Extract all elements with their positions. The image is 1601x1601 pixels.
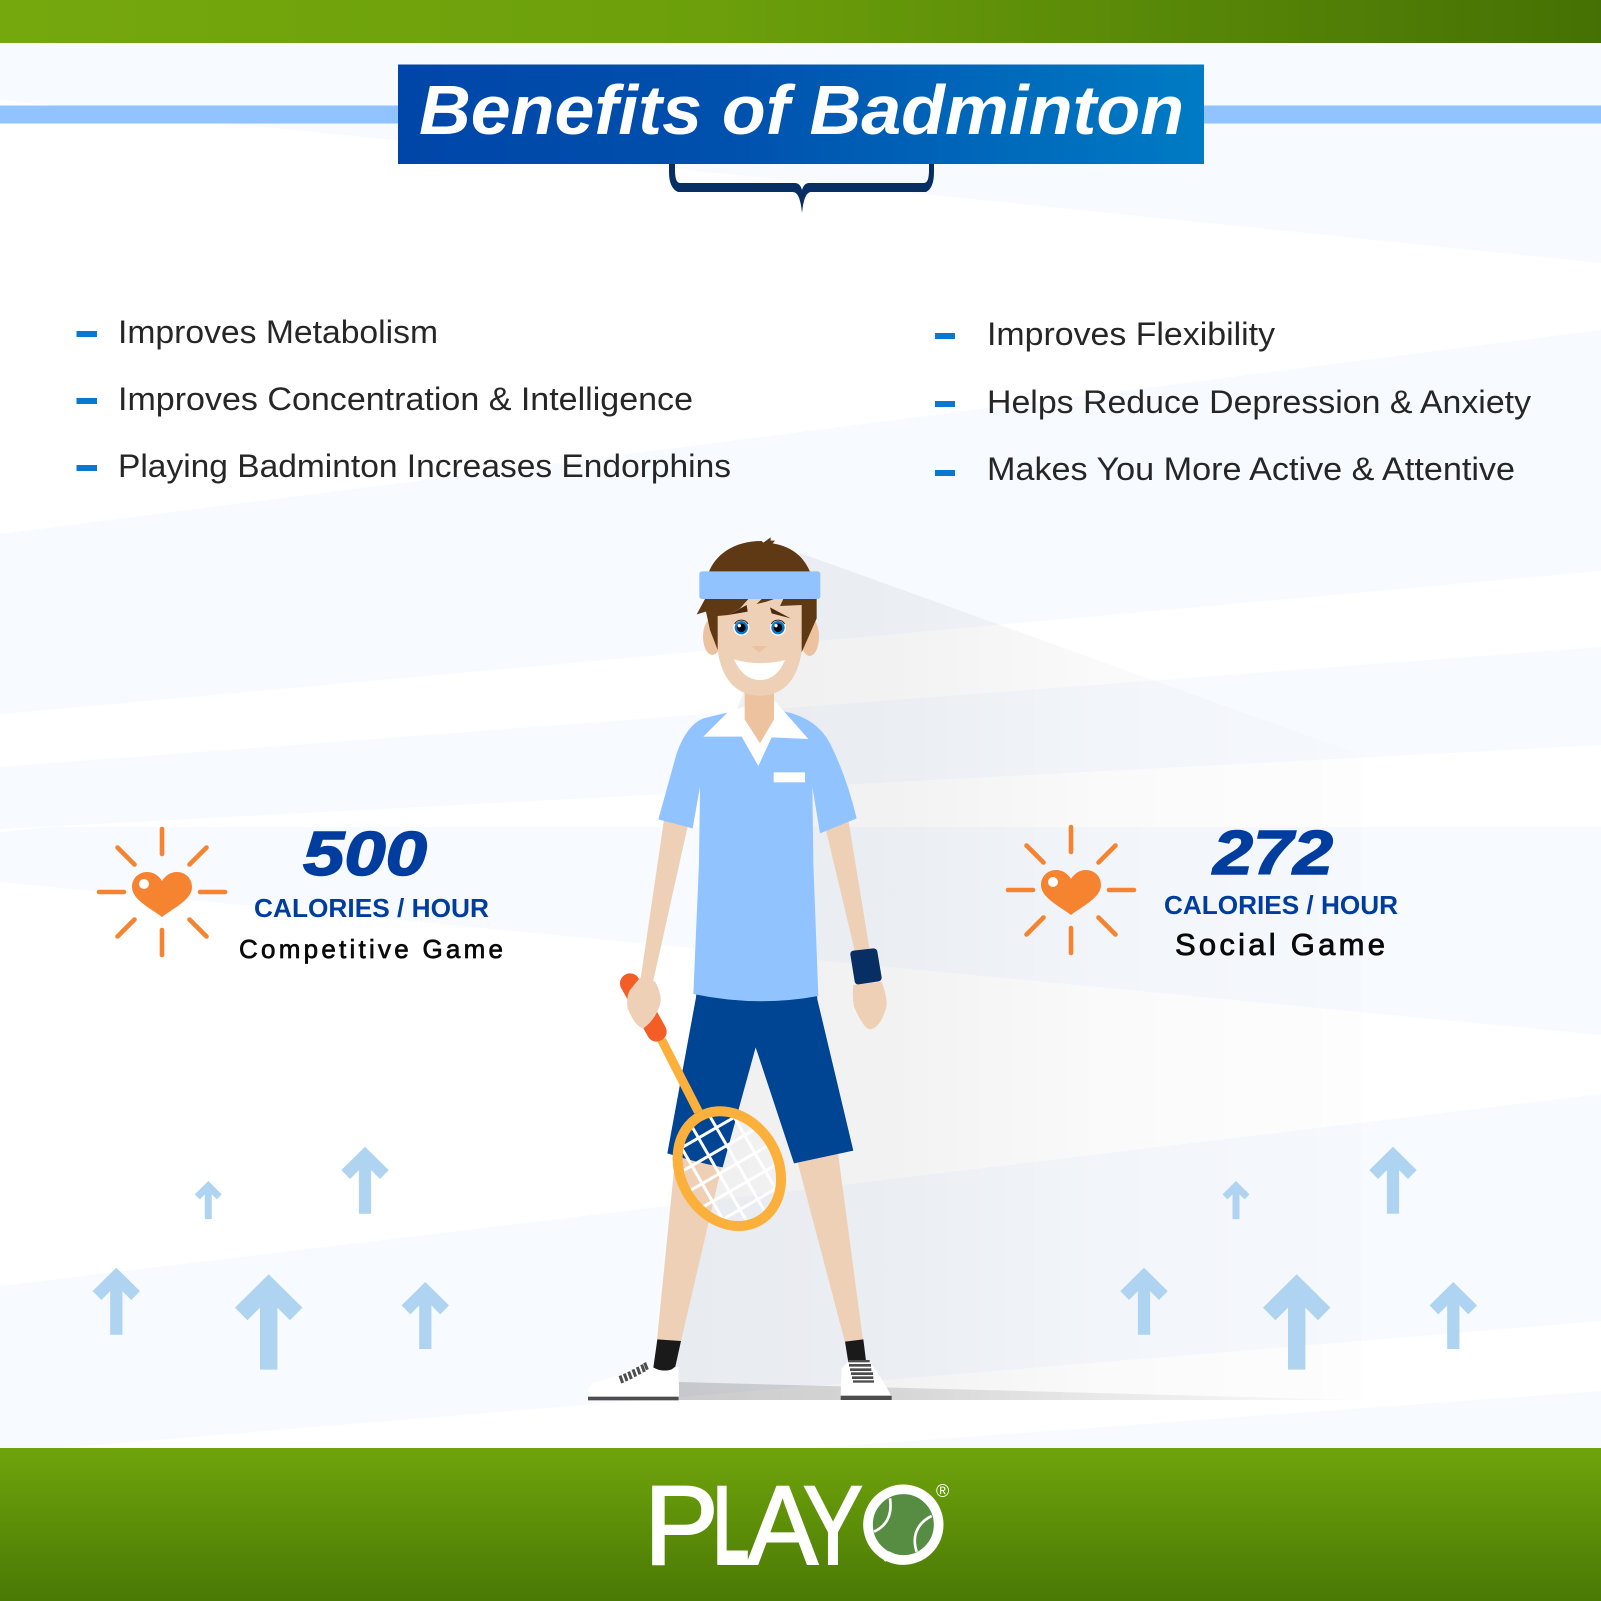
player cast shadow xyxy=(672,553,1361,1400)
Playo logo xyxy=(644,1463,949,1588)
badminton player xyxy=(588,537,892,1400)
ground shadow xyxy=(679,1382,1361,1400)
eyes xyxy=(733,620,786,636)
wordmark: Y xyxy=(803,1463,863,1588)
benefits list: right column xyxy=(935,316,1531,487)
headband xyxy=(699,571,820,599)
legs xyxy=(657,1150,863,1342)
socks and shoes xyxy=(588,1339,892,1400)
footer green bar xyxy=(0,1448,1601,1601)
top green bar xyxy=(0,0,1601,43)
number 272: 272 xyxy=(1212,819,1333,888)
stat: competitive game xyxy=(99,820,503,964)
icon: heart sun xyxy=(1008,827,1134,953)
title stripe xyxy=(0,106,1601,124)
shorts xyxy=(667,990,853,1167)
calories per hour: CALORIES / HOUR xyxy=(1164,890,1398,920)
ears xyxy=(703,617,819,656)
smile xyxy=(734,659,785,680)
bullet: endorphins: Playing Badminton Increases Endorphins xyxy=(118,448,731,484)
fringe xyxy=(697,599,817,652)
collar and neck xyxy=(703,687,808,782)
wordmark: L xyxy=(714,1463,749,1588)
left arrows xyxy=(93,1147,449,1370)
game label: Competitive Game xyxy=(239,934,503,964)
calories per hour: CALORIES / HOUR xyxy=(254,893,489,923)
face xyxy=(718,599,802,696)
ball icon xyxy=(868,1489,939,1562)
bullet: flexibility: Improves Flexibility xyxy=(987,316,1275,352)
nose xyxy=(751,646,768,652)
arms xyxy=(640,818,870,983)
hair xyxy=(708,537,811,573)
game label: Social Game xyxy=(1175,927,1385,962)
head xyxy=(697,537,820,696)
bullet: concentration: Improves Concentration & Intelligence xyxy=(118,381,693,417)
wordmark: A xyxy=(747,1463,818,1588)
bullet: depression: Helps Reduce Depression & Anxiety xyxy=(987,384,1531,420)
number 500: 500 xyxy=(303,820,427,889)
title banner xyxy=(398,64,1204,164)
right arrows xyxy=(1120,1147,1477,1370)
left hand xyxy=(627,978,661,1028)
heading: Benefits of Badminton xyxy=(419,71,1184,149)
bullet: metabolism: Improves Metabolism xyxy=(118,314,438,350)
racket shaft xyxy=(662,1040,698,1112)
shirt xyxy=(658,712,857,1001)
bullet: active: Makes You More Active & Attentive xyxy=(987,451,1515,487)
racket handle xyxy=(630,983,657,1032)
wordmark: P xyxy=(644,1463,719,1588)
registered mark: ® xyxy=(936,1481,949,1501)
stat: social game xyxy=(1008,819,1398,962)
benefits list: left column xyxy=(76,314,731,484)
racket xyxy=(620,973,786,1231)
right hand and wristband xyxy=(850,948,887,1029)
wordmark xyxy=(644,1463,863,1588)
racket head xyxy=(672,1106,786,1231)
icon: heart sun xyxy=(99,829,225,955)
title bracket xyxy=(669,164,934,213)
eyebrows xyxy=(728,605,791,618)
